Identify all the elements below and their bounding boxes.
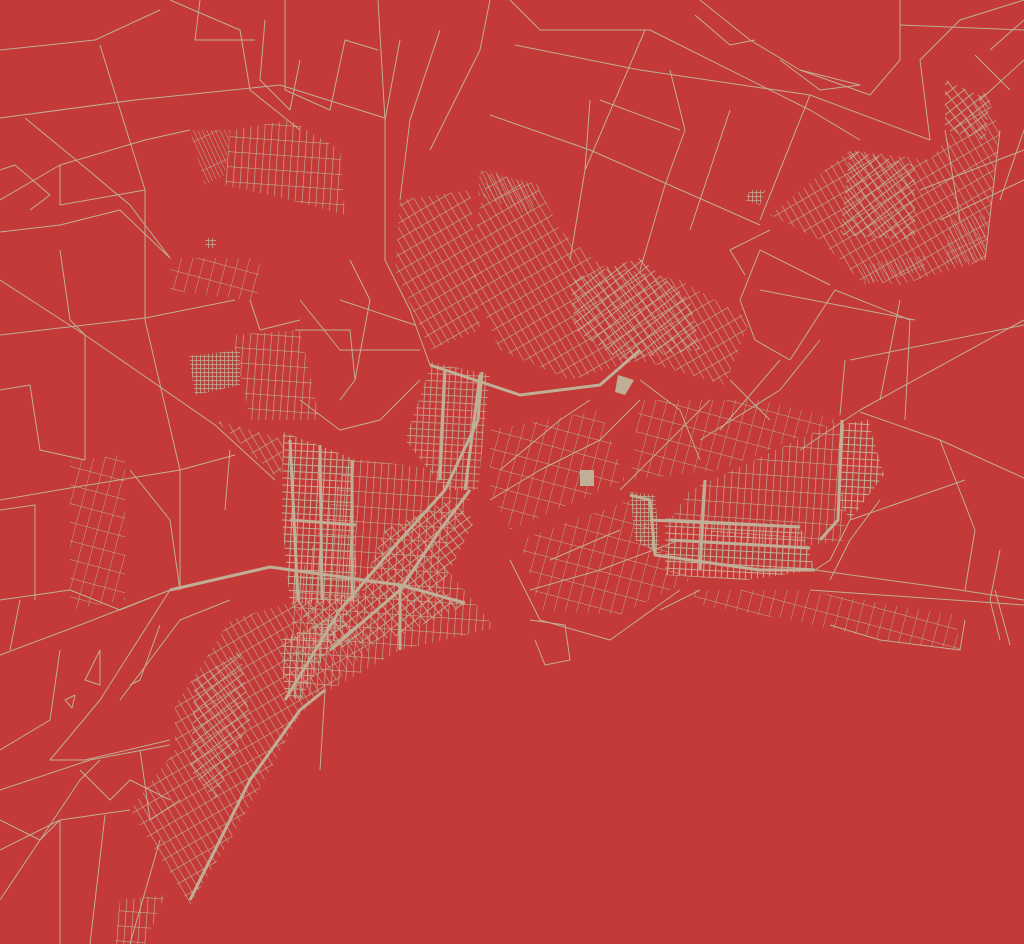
major roads — [170, 350, 842, 900]
